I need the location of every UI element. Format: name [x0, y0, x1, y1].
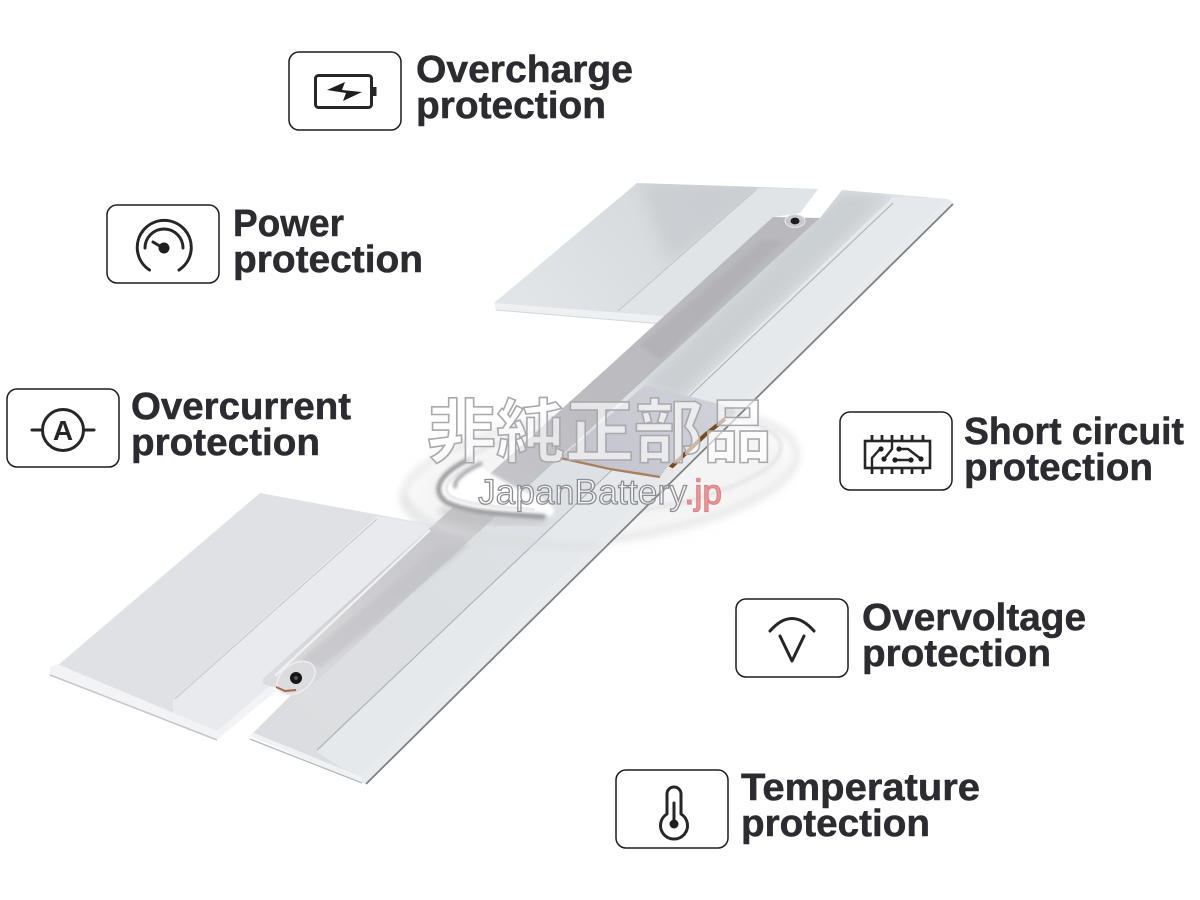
icon: voltage arc: [736, 599, 848, 677]
main long strip: [250, 190, 953, 784]
label: [233, 203, 423, 281]
label: protection: [741, 803, 930, 845]
label: [862, 597, 1086, 675]
label: protection: [233, 239, 423, 281]
label: [416, 49, 633, 127]
label: Overcharge: [416, 49, 633, 91]
feature: power protection: [107, 203, 423, 283]
translucent grey band: [262, 217, 820, 692]
icon: gauge: [107, 205, 219, 283]
label: protection: [131, 422, 320, 464]
feature: overvoltage protection: [736, 597, 1086, 677]
feature: short circuit protection: [840, 411, 1184, 490]
watermark: 非純正部品: [427, 394, 772, 471]
label: protection: [862, 633, 1051, 675]
label: Short circuit: [964, 411, 1184, 453]
icon: ammeter: [7, 389, 119, 467]
label: protection: [964, 447, 1153, 489]
label: Overvoltage: [862, 597, 1086, 639]
watermark: JapanBattery.jp: [478, 473, 722, 512]
side face: [355, 199, 953, 784]
watermark: [427, 394, 772, 512]
label: Overcurrent: [131, 386, 351, 428]
feature: overcharge protection: [289, 49, 633, 130]
feature: temperature protection: [616, 767, 980, 848]
label: [131, 386, 351, 464]
label: [741, 767, 980, 845]
swirl rings behind the battery: [396, 388, 804, 564]
connector hole, top: [785, 214, 805, 228]
icon: thermometer: [616, 770, 728, 848]
feature: overcurrent protection: [7, 386, 351, 467]
battery illustration: [50, 182, 953, 784]
cut-away coil panel: [560, 385, 736, 481]
label: [964, 411, 1184, 489]
icon: circuit chip: [840, 412, 952, 490]
label: protection: [416, 85, 606, 127]
lower left panel: [50, 493, 445, 740]
icon: battery with bolt: [289, 52, 401, 130]
icon: ammeter: A: [53, 415, 73, 446]
silver swirl ring: [405, 455, 600, 545]
label: Power: [233, 203, 344, 245]
upper panel: [494, 182, 818, 324]
connector hole, bottom: [271, 654, 321, 702]
label: Temperature: [741, 767, 980, 809]
